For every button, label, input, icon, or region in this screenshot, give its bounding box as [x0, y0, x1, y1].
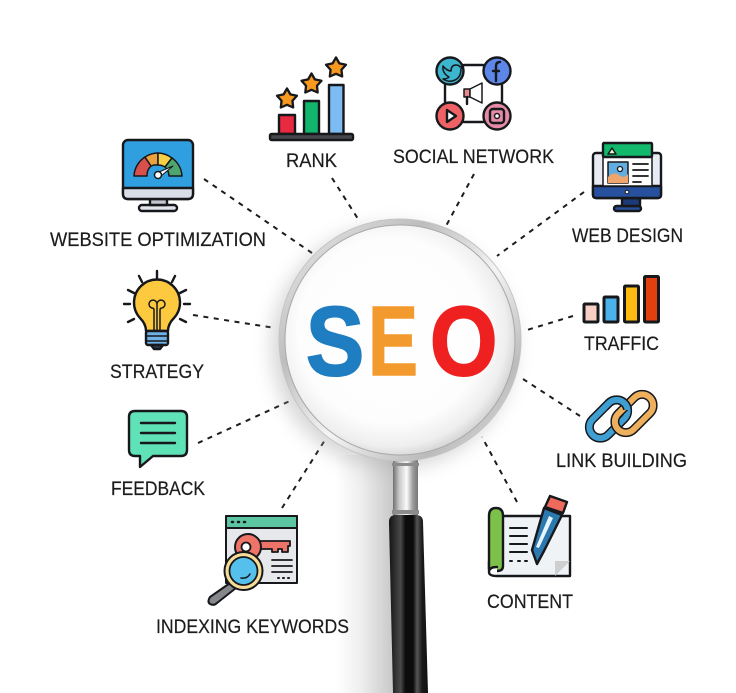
SEO wordmark: E	[368, 287, 418, 396]
icon: social network	[436, 58, 510, 130]
label: content: CONTENT	[487, 591, 573, 613]
icon: web design	[593, 143, 661, 211]
icon: content scroll and pen	[489, 496, 570, 576]
label: strategy: STRATEGY	[110, 361, 204, 383]
label: feedback: FEEDBACK	[111, 478, 205, 500]
lens	[278, 218, 522, 462]
icon: traffic bars	[584, 276, 658, 322]
label: link building: LINK BUILDING	[556, 450, 687, 472]
label: web design: WEB DESIGN	[572, 225, 683, 247]
label: rank: RANK	[286, 150, 337, 172]
magnifying glass	[271, 218, 522, 693]
icon: link building chain	[585, 390, 658, 443]
handle collar	[392, 460, 419, 516]
label: traffic: TRAFFIC	[584, 333, 659, 355]
black handle	[389, 515, 428, 693]
label: social network: SOCIAL NETWORK	[393, 146, 554, 168]
label: indexing keywords: INDEXING KEYWORDS	[156, 616, 349, 638]
icon: feedback speech bubble	[129, 411, 187, 467]
handle shadow	[335, 455, 393, 693]
icon: strategy bulb	[124, 271, 190, 349]
SEO wordmark: S	[306, 286, 364, 396]
SEO wordmark	[306, 286, 497, 396]
icon: indexing keywords	[208, 516, 297, 605]
icon: rank	[270, 58, 353, 140]
lens shadow	[271, 225, 515, 469]
connector lines	[193, 174, 584, 508]
icon: website optimization	[123, 140, 193, 211]
SEO wordmark: O	[430, 286, 497, 396]
label: website optimization: WEBSITE OPTIMIZATION	[50, 229, 266, 251]
